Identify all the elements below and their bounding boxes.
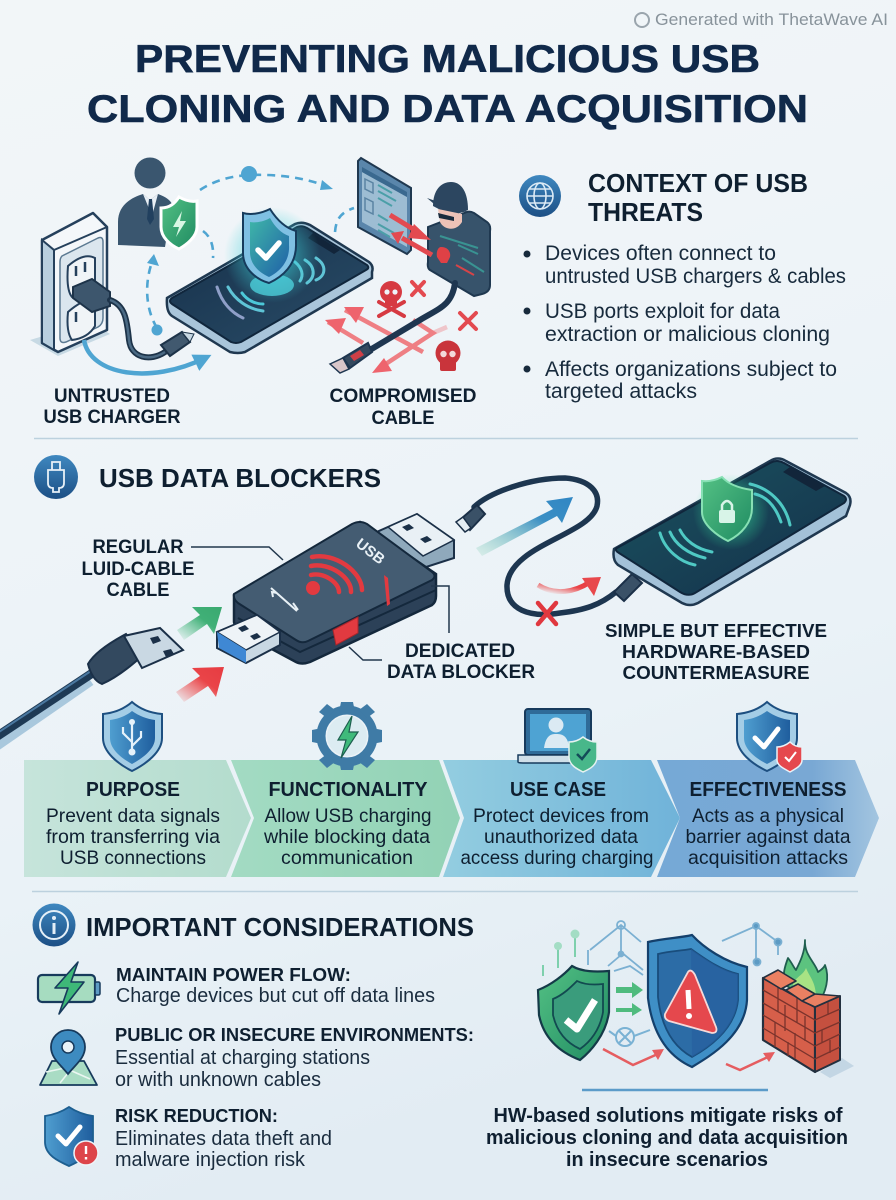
item: risk reduction: Eliminates data theft and [115, 1128, 332, 1150]
icon: usb plug [34, 455, 78, 499]
icon: info [32, 904, 76, 946]
label: regular luid-cable cable [82, 537, 194, 601]
title [87, 38, 808, 131]
panel: use case: access during charging [460, 847, 654, 869]
label: dedicated data blocker [387, 641, 535, 683]
illustration: compromised cable and hacker [325, 158, 490, 373]
arrow: red curved blocked [538, 582, 590, 592]
title: CLONING AND DATA ACQUISITION [87, 88, 808, 131]
title: PREVENTING MALICIOUS USB [135, 38, 760, 81]
item: maintain power flow: MAINTAIN POWER FLOW: [116, 965, 351, 985]
panel: effectiveness: acquisition attacks [688, 847, 848, 869]
bullet list: Devices often connect to [545, 242, 776, 265]
icon: smartphone [167, 223, 373, 353]
red data exchange arrows [390, 215, 432, 255]
panel: use case [443, 760, 680, 877]
label: regular luid-cable cable: LUID-CABLE [82, 559, 194, 580]
label: dedicated data blocker: DATA BLOCKER [387, 662, 535, 683]
heading: THREATS [588, 197, 703, 227]
panel: purpose: USB connections [60, 847, 206, 869]
coiled cable [456, 478, 642, 614]
divider line [582, 1089, 768, 1091]
panel: functionality: Allow USB charging [264, 805, 432, 827]
panel: usb data blockers [0, 455, 850, 745]
label: regular luid-cable cable: CABLE [106, 580, 170, 601]
icon: green check shield [538, 966, 609, 1060]
icon: large alert shield [648, 935, 747, 1067]
usb cable left [0, 628, 183, 745]
label: compromised cable: CABLE [372, 407, 434, 429]
icon: locked phone [614, 458, 850, 605]
arrowhead [582, 577, 601, 596]
item: maintain power flow [116, 965, 435, 1007]
red arrows [603, 1049, 770, 1070]
heading: USB DATA BLOCKERS [99, 463, 381, 493]
label: simple but effective: SIMPLE BUT EFFECTIVE [605, 620, 827, 641]
caption [486, 1105, 848, 1171]
red switch [333, 617, 358, 645]
item: maintain power flow: Charge devices but cut off data lines [116, 985, 435, 1007]
bullet list [524, 242, 846, 403]
heading [588, 168, 808, 227]
caption: HW-based solutions mitigate risks of [494, 1105, 843, 1127]
label: compromised cable: COMPROMISED [330, 385, 476, 407]
panel: context of usb threats [519, 168, 846, 403]
icon: globe [519, 175, 561, 217]
icon: usb shield [103, 702, 162, 771]
brick mortar lines [763, 987, 840, 1059]
item: public or insecure environments: PUBLIC OR INSECURE ENVIRONMENTS: [115, 1025, 474, 1045]
item: public or insecure environments: or with unknown cables [115, 1069, 321, 1091]
arrow: charger to phone [84, 340, 205, 373]
label: untrusted usb charger [44, 385, 180, 428]
icon: glowing shield [224, 207, 320, 303]
bullet list: targeted attacks [545, 380, 697, 403]
panel: purpose: Prevent data signals [46, 805, 220, 827]
panel: purpose: PURPOSE [86, 779, 180, 801]
crossing red arrows [325, 307, 447, 373]
icon: check shield [737, 702, 802, 772]
panel: purpose: from transferring via [46, 826, 220, 848]
label: simple but effective: COUNTERMEASURE [622, 662, 810, 683]
illustration: untrusted charger and phone [30, 158, 373, 373]
icon: firewall [763, 970, 854, 1078]
icon: skull [436, 340, 460, 371]
red wifi symbol [306, 556, 362, 595]
icon: browser window [358, 158, 411, 254]
bullet list: Affects organizations subject to [545, 358, 837, 381]
item: risk reduction: malware injection risk [115, 1149, 306, 1171]
bullet list: extraction or malicious cloning [545, 323, 830, 346]
white arrows [271, 588, 298, 611]
icon: gear with bolt [312, 702, 382, 770]
heading: CONTEXT OF USB [588, 168, 808, 198]
connector nodes and arrowheads [147, 166, 333, 336]
panel: effectiveness: EFFECTIVENESS [690, 779, 846, 801]
label: simple but effective [605, 620, 827, 683]
wall shadow [820, 1058, 854, 1078]
icon: business person [118, 158, 172, 247]
icon: shield with alert [45, 1107, 98, 1166]
red marker [384, 575, 390, 606]
wall end face [815, 996, 840, 1072]
icon: hacker [427, 182, 490, 296]
upper usb plug [370, 514, 454, 570]
icon: battery [38, 962, 100, 1014]
panel: important considerations [32, 904, 474, 1171]
wall front face [763, 978, 815, 1072]
bullet list: untrusted USB chargers & cables [545, 265, 846, 288]
panel: functionality: FUNCTIONALITY [268, 779, 428, 801]
panel: purpose [24, 760, 251, 877]
panel: functionality: communication [281, 847, 413, 869]
item: risk reduction [115, 1106, 332, 1171]
icon: wall outlet [30, 213, 110, 356]
arrow: green power [177, 607, 222, 640]
icon: skull and crossbones [379, 281, 404, 316]
label: simple but effective: HARDWARE-BASED [622, 641, 810, 662]
panel: functionality: while blocking data [263, 826, 430, 848]
bullet list: USB ports exploit for data [545, 300, 780, 323]
label: untrusted usb charger: UNTRUSTED [54, 385, 170, 407]
network lines [588, 921, 782, 975]
leader lines [191, 547, 449, 660]
lower usb plug [217, 615, 280, 663]
icon: charger cable [73, 279, 194, 357]
dashed connector arcs [147, 175, 354, 328]
icon: laptop with shield [518, 709, 597, 772]
icon: map pin [40, 1030, 97, 1085]
icon: green flame [784, 940, 827, 1004]
phone screen waves [217, 258, 324, 318]
label: untrusted usb charger: USB CHARGER [44, 406, 180, 428]
panel: effectiveness: barrier against data [686, 826, 851, 848]
panel: use case: unauthorized data [484, 826, 638, 848]
panel: use case: USE CASE [510, 779, 606, 801]
panel: effectiveness: Acts as a physical [692, 805, 844, 827]
icon: data blocker device [217, 514, 454, 664]
icon: red x [538, 603, 556, 624]
item: public or insecure environments [115, 1025, 474, 1091]
icon: green shield [161, 197, 197, 249]
item: public or insecure environments: Essential at charging stations [115, 1047, 370, 1069]
blocked valve symbol [609, 1028, 650, 1046]
panel: use case: Protect devices from [473, 805, 649, 827]
wall top bricks [763, 970, 840, 1007]
panel: functionality [231, 760, 460, 877]
label: regular luid-cable cable: REGULAR [92, 537, 184, 558]
chevron band [24, 702, 879, 877]
arrowheads [652, 1049, 775, 1062]
caption: malicious cloning and data acquisition [486, 1127, 848, 1149]
label: dedicated data blocker: DEDICATED [405, 641, 515, 662]
illustration: layered protection [486, 921, 854, 1171]
heading: IMPORTANT CONSIDERATIONS [86, 912, 474, 942]
green signal pins [543, 930, 580, 976]
caption: in insecure scenarios [566, 1149, 768, 1171]
arrow: blue outgoing [476, 497, 573, 556]
icon: red x marks [412, 282, 476, 329]
compromised cable [330, 283, 455, 373]
panel: effectiveness [657, 760, 879, 877]
label: compromised cable [330, 385, 476, 429]
arrow: red data [176, 667, 224, 702]
item: risk reduction: RISK REDUCTION: [115, 1106, 278, 1126]
watermark: Generated with ThetaWave AI [655, 10, 888, 29]
usb label on device: USB [352, 535, 388, 568]
green arrows [616, 982, 643, 1016]
